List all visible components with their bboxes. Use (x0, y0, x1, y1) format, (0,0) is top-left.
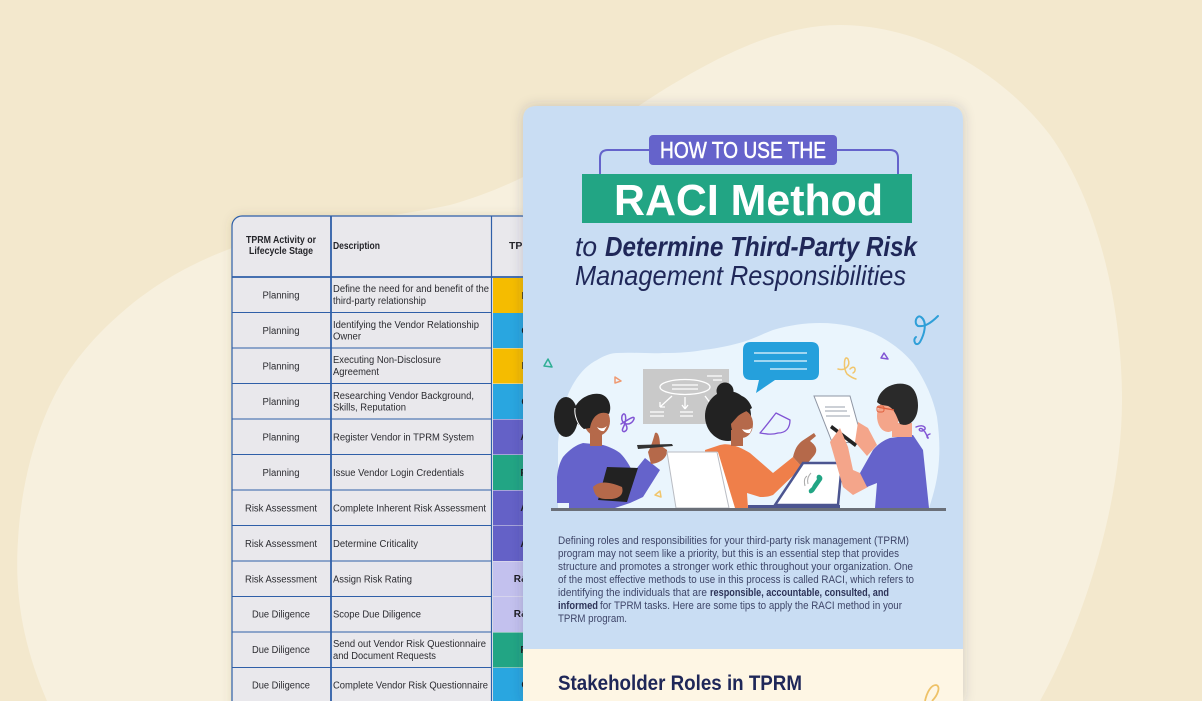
man with document (814, 384, 929, 508)
table header: Lifecycle Stage (249, 245, 313, 257)
intro paragraph: identifying the individuals that are (558, 587, 707, 599)
stage column: Due Diligence (252, 645, 310, 656)
stage column (245, 290, 317, 692)
stage column: Risk Assessment (245, 539, 317, 550)
desk line (551, 508, 946, 511)
table header: TPRM Activity or (246, 234, 316, 246)
description column: Owner (333, 332, 362, 342)
intro paragraph: structure and promotes a stronger work ethic throughout your organization. One (558, 561, 913, 573)
stage column: Planning (262, 326, 300, 337)
RACI colour cells: R (520, 468, 528, 479)
RACI colour cells: C (521, 680, 529, 691)
intro paragraph: informed (558, 600, 598, 612)
infographic card (523, 106, 963, 701)
stage column: Planning (262, 468, 300, 479)
description column: Agreement (333, 367, 379, 378)
table header: TPRM (509, 240, 539, 252)
section heading: stakeholder roles: Stakeholder Roles in TPRM (558, 672, 802, 695)
RACI colour cells: I (522, 291, 525, 302)
description column: Send out Vendor Risk Questionnaire (333, 639, 486, 650)
RACI colour cells: C (521, 326, 529, 337)
description column: Complete Inherent Risk Assessment (333, 504, 486, 514)
speech bubble (743, 342, 819, 393)
stage column: Risk Assessment (245, 504, 317, 514)
RACI colour cells: I (522, 361, 525, 372)
RACI colour cells: A (520, 432, 528, 443)
title block: RACI Method (614, 176, 883, 225)
stage column: Risk Assessment (245, 574, 317, 586)
intro paragraph (558, 535, 914, 625)
description column: third-party relationship (333, 296, 426, 307)
decorative yellow loop (925, 685, 939, 701)
cream section (523, 649, 963, 701)
description column: Researching Vendor Background, (333, 391, 474, 402)
table header: Description (333, 240, 380, 252)
intro paragraph: responsible, accountable, consulted, and (710, 587, 889, 599)
description column: Issue Vendor Login Credentials (333, 468, 464, 479)
description column: Assign Risk Rating (333, 574, 412, 586)
description column (333, 284, 489, 692)
RACI colour cells: C (521, 397, 529, 408)
description column: Skills, Reputation (333, 402, 406, 414)
intro paragraph: TPRM program. (558, 613, 627, 625)
description column: Executing Non-Disclosure (333, 355, 441, 366)
illustration: team meeting (544, 316, 946, 511)
laptop with phone icon (748, 463, 842, 509)
description column: Complete Vendor Risk Questionnaire (333, 680, 488, 692)
open laptop from behind (667, 452, 735, 508)
woman with curly hair (705, 382, 816, 508)
table header (246, 234, 539, 257)
RACI colour cells: A (520, 539, 528, 550)
stage column: Due Diligence (252, 680, 310, 692)
stage column: Planning (262, 290, 300, 302)
description column: Determine Criticality (333, 539, 418, 550)
title block: Determine Third-Party Risk (605, 231, 918, 262)
stage column: Due Diligence (252, 610, 310, 620)
decorative squiggles and triangles (544, 316, 938, 497)
RACI colour cells: R& (514, 574, 528, 585)
description column: Scope Due Diligence (333, 610, 421, 620)
stage column: Planning (262, 432, 300, 444)
RACI colour cells (493, 278, 533, 701)
description column: Register Vendor in TPRM System (333, 432, 474, 444)
intro paragraph: program may not seem like a priority, but this is an essential step that provides (558, 548, 899, 560)
intro paragraph: of the most effective methods to use in this process is called RACI, which refers to (558, 574, 914, 586)
title block: Management Responsibilities (575, 260, 906, 291)
title block: HOW TO USE THE (660, 137, 826, 163)
RACI colour cells: R& (514, 609, 528, 620)
stage column: Planning (262, 397, 300, 408)
description column: Identifying the Vendor Relationship (333, 320, 479, 331)
title block (575, 135, 918, 291)
stage column: Planning (262, 362, 300, 372)
description column: and Document Requests (333, 651, 436, 662)
RACI colour cells: R (520, 645, 528, 656)
RACI colour cells: A (520, 503, 528, 514)
intro paragraph: Defining roles and responsibilities for your third-party risk management (TPRM) (558, 535, 909, 547)
table: TPRM RACI chart (232, 216, 539, 701)
title block: to (575, 231, 597, 262)
description column: Define the need for and benefit of the (333, 284, 489, 295)
intro paragraph: for TPRM tasks. Here are some tips to apply the RACI method in your (600, 600, 902, 612)
whiteboard (643, 369, 729, 424)
woman with tablet (554, 394, 673, 508)
